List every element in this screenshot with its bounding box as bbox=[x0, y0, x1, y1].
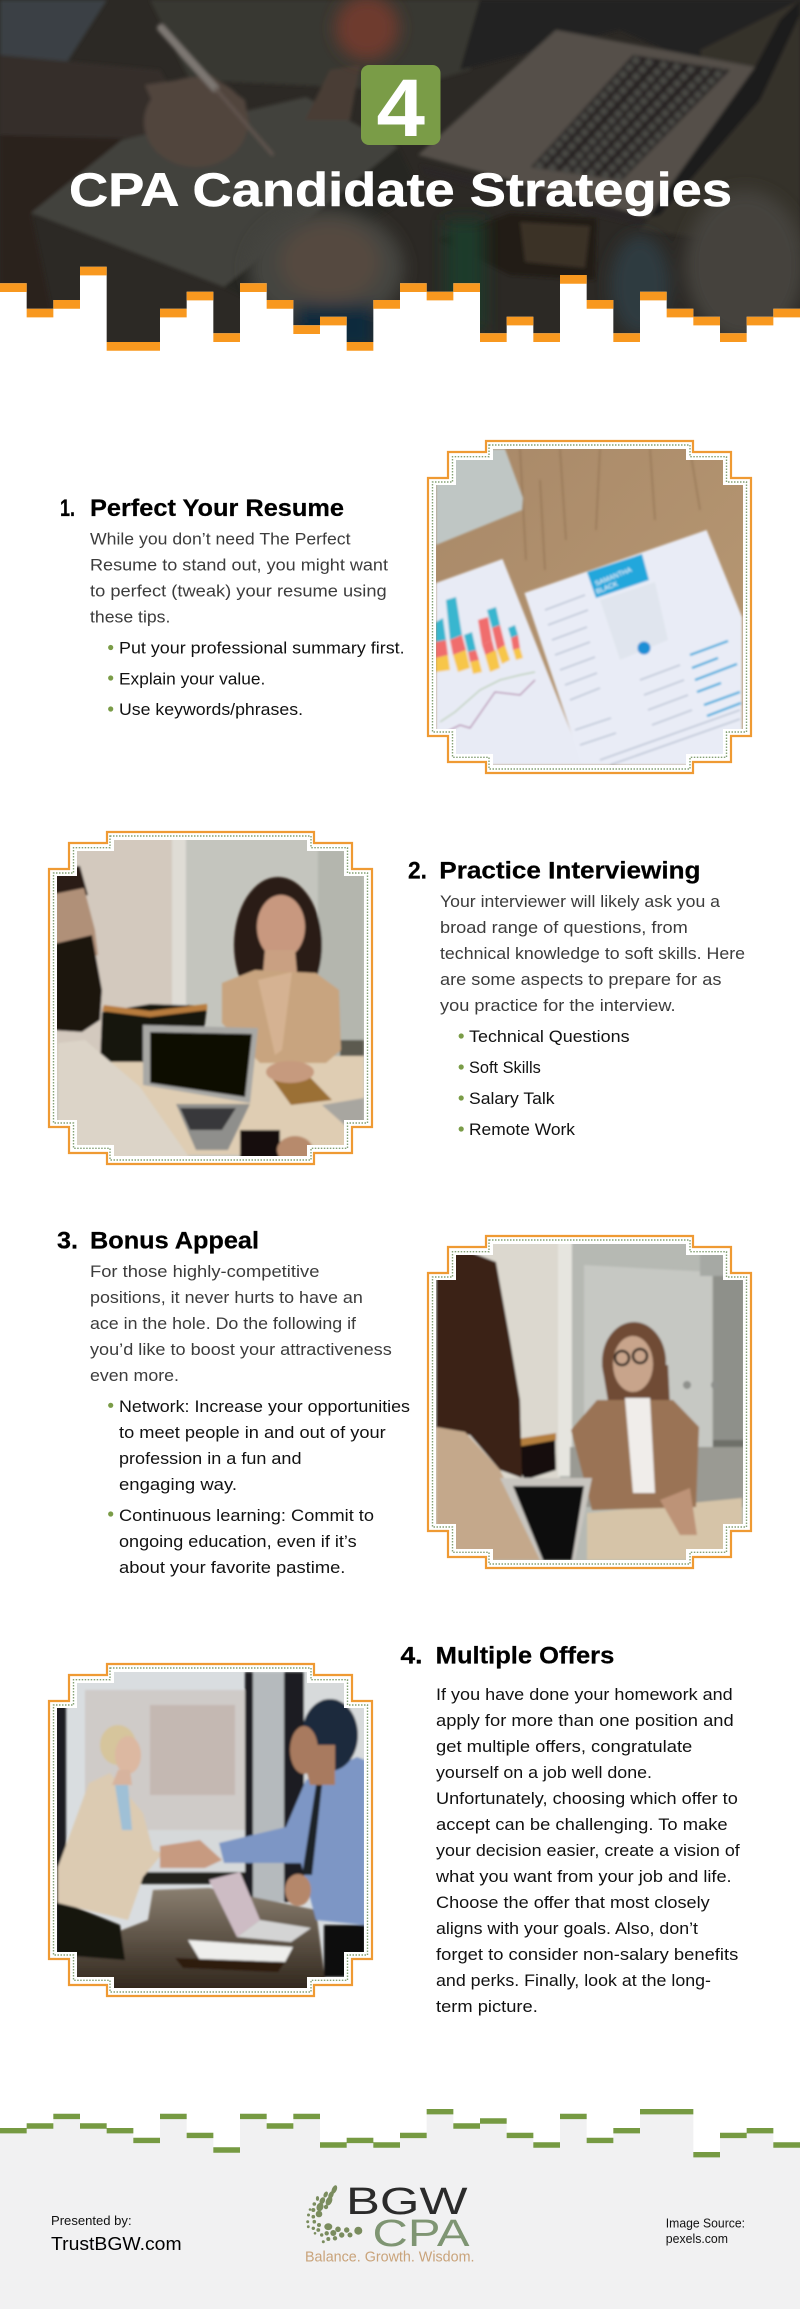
intro text 2: you practice for the interview. bbox=[440, 997, 676, 1015]
framed photo: handshake bbox=[49, 1664, 372, 1996]
bullet list 3: Continuous learning: Commit to bbox=[119, 1507, 374, 1525]
intro text 2: technical knowledge to soft skills. Here bbox=[440, 945, 745, 963]
green skyline steps bbox=[0, 2109, 800, 2157]
heading 2: 2. bbox=[408, 857, 427, 884]
body text 4: your decision easier, create a vision of bbox=[436, 1842, 740, 1860]
heading 1: 1. bbox=[60, 495, 75, 522]
logo: BGW CPA bbox=[305, 2181, 474, 2266]
bullet list 3: ongoing education, even if it’s bbox=[119, 1533, 357, 1551]
intro text 1: to perfect (tweak) your resume using bbox=[90, 582, 387, 600]
bullet list 1 bbox=[108, 640, 405, 719]
footer grey skyline background bbox=[0, 2109, 800, 2309]
intro text 3: positions, it never hurts to have an bbox=[90, 1289, 363, 1307]
bullet list 1: Use keywords/phrases. bbox=[119, 701, 303, 719]
body text 4: aligns with your goals. Also, don’t bbox=[436, 1920, 698, 1938]
intro text 1: these tips. bbox=[90, 608, 170, 626]
heading 3: Bonus Appeal bbox=[90, 1228, 259, 1255]
presented by bbox=[51, 2213, 182, 2254]
body text 4: and perks. Finally, look at the long- bbox=[436, 1972, 711, 1990]
intro text 3: even more. bbox=[90, 1367, 179, 1385]
bullet list 2: Salary Talk bbox=[469, 1090, 555, 1108]
image source: pexels.com bbox=[666, 2232, 728, 2246]
framed photo: woman in glasses bbox=[428, 1236, 751, 1568]
body text 4 bbox=[435, 1686, 740, 2016]
body text 4: Choose the offer that most closely bbox=[436, 1894, 711, 1912]
bullet list 2: Technical Questions bbox=[469, 1028, 630, 1046]
orange stepped frame bbox=[49, 1664, 372, 1996]
heading 3: 3. bbox=[57, 1228, 78, 1255]
logo: BGW CPA: BGW bbox=[346, 2181, 468, 2223]
body text 4: get multiple offers, congratulate bbox=[436, 1738, 692, 1756]
logo leaf dots bbox=[306, 2184, 362, 2243]
framed photo: resume on desk: SAMANTHA bbox=[594, 567, 633, 588]
intro text 3: ace in the hole. Do the following if bbox=[90, 1315, 356, 1333]
image source bbox=[666, 2216, 745, 2246]
body text 4: accept can be challenging. To make bbox=[436, 1816, 728, 1834]
body text 4: yourself on a job well done. bbox=[436, 1764, 652, 1782]
body text 4: term picture. bbox=[436, 1998, 538, 2016]
bullet list 3: profession in a fun and bbox=[119, 1450, 302, 1468]
heading 4: Multiple Offers bbox=[436, 1642, 614, 1669]
section 3: bonus appeal bbox=[57, 1228, 751, 1577]
presented by: TrustBGW.com bbox=[51, 2234, 182, 2254]
dotted inner frame bbox=[54, 836, 368, 1160]
body text 4: If you have done your homework and bbox=[436, 1686, 733, 1704]
intro text 2: Your interviewer will likely ask you a bbox=[440, 893, 721, 911]
orange stepped frame bbox=[428, 441, 751, 773]
framed photo: resume on desk bbox=[428, 441, 751, 773]
body text 4: what you want from your job and life. bbox=[435, 1868, 732, 1886]
intro text 2 bbox=[440, 893, 745, 1015]
bullet list 1: Put your professional summary first. bbox=[119, 640, 405, 658]
logo: BGW CPA: Balance. Growth. Wisdom. bbox=[305, 2248, 474, 2266]
dotted inner frame bbox=[432, 1240, 746, 1564]
heading 1: Perfect Your Resume bbox=[90, 495, 344, 522]
bullet list 3: about your favorite pastime. bbox=[119, 1559, 345, 1577]
framed photo: resume on desk: BLACK bbox=[595, 581, 619, 596]
bullet list 3: to meet people in and out of your bbox=[119, 1424, 386, 1442]
section 2: practice interviewing bbox=[49, 832, 745, 1164]
orange stepped frame bbox=[49, 832, 372, 1164]
image source: Image Source: bbox=[666, 2216, 745, 2230]
orange stepped frame bbox=[428, 1236, 751, 1568]
white skyline cut-out bbox=[0, 267, 800, 360]
number badge: 4 bbox=[376, 63, 425, 154]
intro text 3: you’d like to boost your attractiveness bbox=[90, 1341, 392, 1359]
bullet list 2: Soft Skills bbox=[469, 1059, 541, 1077]
number badge bbox=[361, 63, 440, 154]
heading 2: Practice Interviewing bbox=[439, 857, 700, 884]
body text 4: forget to consider non-salary benefits bbox=[436, 1946, 738, 1964]
body text 4: Unfortunately, choosing which offer to bbox=[436, 1790, 738, 1808]
section 1: perfect your resume bbox=[60, 441, 751, 773]
header banner bbox=[0, 0, 800, 360]
bullet list 3: Network: Increase your opportunities bbox=[119, 1398, 410, 1416]
intro text 3: For those highly-competitive bbox=[90, 1263, 319, 1281]
presented by: Presented by: bbox=[51, 2213, 132, 2228]
bullet list 3: engaging way. bbox=[119, 1476, 237, 1494]
logo: BGW CPA: CPA bbox=[372, 2213, 470, 2255]
dotted inner frame bbox=[432, 445, 746, 769]
bullet list 3 bbox=[108, 1398, 410, 1577]
section 4: multiple offers bbox=[49, 1642, 740, 2016]
dotted inner frame bbox=[54, 1668, 368, 1992]
orange skyline steps bbox=[0, 267, 800, 351]
footer bbox=[0, 2109, 800, 2309]
intro text 1: While you don’t need The Perfect bbox=[90, 530, 351, 548]
bullet list 1: Explain your value. bbox=[119, 670, 265, 688]
intro text 3 bbox=[90, 1263, 392, 1385]
framed photo: woman at interview bbox=[49, 832, 372, 1164]
intro text 2: are some aspects to prepare for as bbox=[440, 971, 721, 989]
body text 4: apply for more than one position and bbox=[436, 1712, 734, 1730]
intro text 1: Resume to stand out, you might want bbox=[90, 556, 388, 574]
title: CPA Candidate Strategies bbox=[69, 163, 732, 216]
intro text 1 bbox=[90, 530, 388, 626]
intro text 2: broad range of questions, from bbox=[440, 919, 688, 937]
bullet list 2: Remote Work bbox=[469, 1121, 576, 1139]
heading 4: 4. bbox=[400, 1642, 422, 1669]
bullet list 2 bbox=[459, 1028, 630, 1139]
header photo: desk with notebook and laptop bbox=[0, 0, 800, 350]
